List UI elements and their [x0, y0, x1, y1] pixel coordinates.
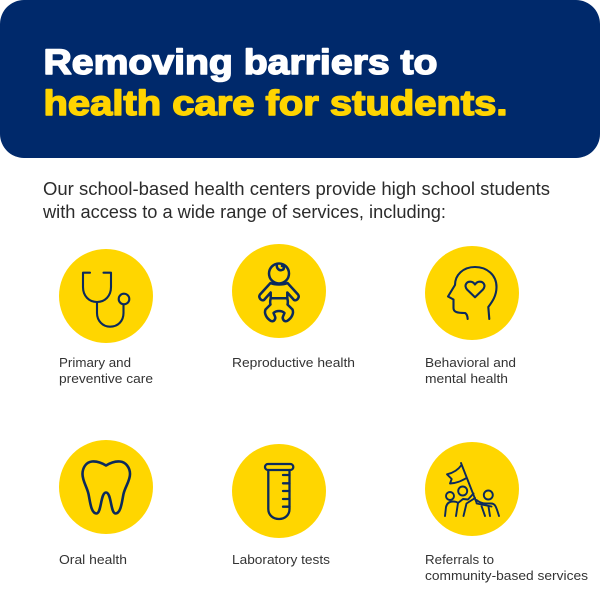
label: preventive care — [59, 371, 153, 386]
service: behavioral and mental health — [425, 246, 519, 386]
title: health care for students. — [44, 84, 508, 123]
service: referrals to community-based services — [425, 442, 589, 583]
label: Primary and — [59, 355, 131, 370]
label: Oral health — [59, 552, 127, 567]
service: oral health — [59, 440, 153, 567]
label — [59, 355, 153, 386]
icon: head with heart — [448, 267, 496, 319]
label: Laboratory tests — [232, 552, 331, 567]
label: Behavioral and — [425, 355, 516, 370]
title — [44, 43, 508, 123]
label — [425, 355, 516, 386]
icon: tooth — [82, 461, 130, 514]
label: mental health — [425, 371, 508, 386]
service: reproductive health — [232, 244, 355, 370]
icon: stethoscope — [83, 273, 129, 327]
icon: test tube — [265, 464, 293, 519]
title: Removing barriers to — [44, 43, 438, 82]
intro text: Our school-based health centers provide high school students — [43, 179, 550, 199]
icon: baby — [259, 264, 299, 321]
intro text: with access to a wide range of services, including: — [42, 202, 446, 222]
label — [425, 552, 589, 583]
service: laboratory tests — [232, 444, 331, 567]
icon: people raising flag — [445, 463, 499, 516]
label: community-based services — [425, 568, 589, 583]
service: primary and preventive care — [59, 249, 153, 386]
intro text — [42, 179, 550, 222]
label: Referrals to — [425, 552, 494, 567]
label: Reproductive health — [232, 355, 355, 370]
panel: header banner — [0, 0, 600, 158]
